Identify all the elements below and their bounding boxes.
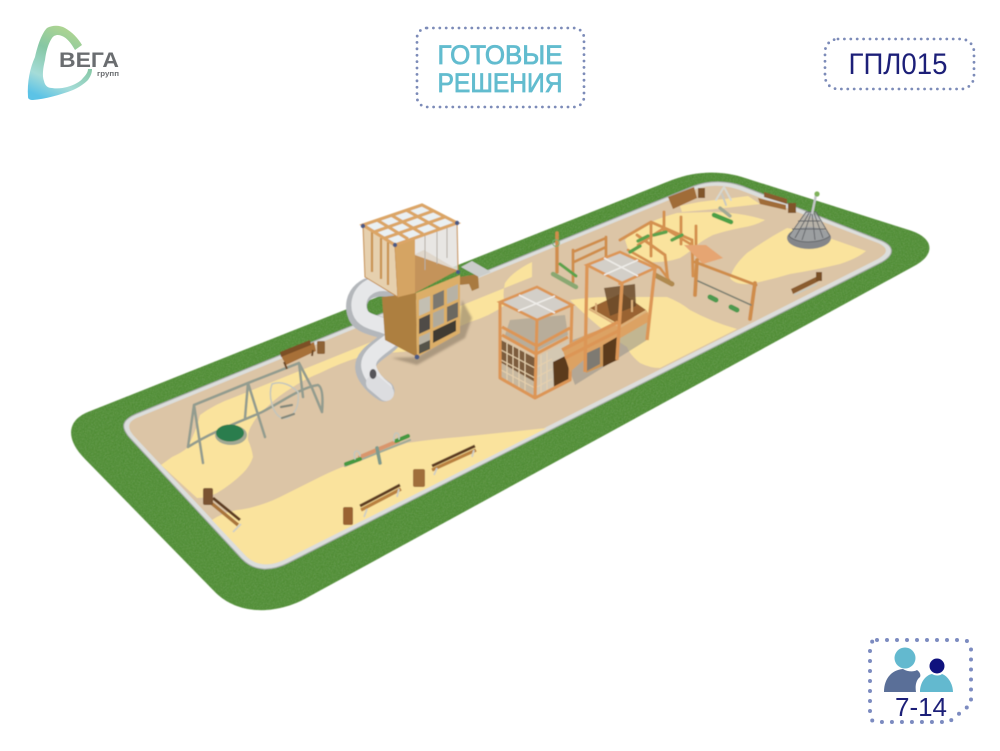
net wall [500,340,535,398]
logo subtitle: групп [97,71,119,78]
seesaw [345,433,410,466]
deck shadow [560,320,650,385]
bench: lower left [360,485,401,517]
logo crescent icon [28,26,92,100]
tower [361,205,479,365]
badge heading line 2: РЕШЕНИЯ [438,68,562,98]
tower corner joints [361,221,460,359]
posts [562,252,655,372]
logo wordmark: ВЕГА [59,49,119,72]
lower box panels [419,284,458,354]
yellow zone: upper left strip and swing area [161,262,532,498]
badge: age group [870,640,971,722]
play structure: cube with net [500,287,650,398]
bin 1 [413,469,425,487]
badge: ready solutions [417,28,584,107]
climbing net dome [787,191,831,249]
sand surface [129,186,886,564]
yellow zone: right [730,228,866,284]
bench: far left [210,498,241,532]
curb [124,182,891,569]
badge heading line 1: ГОТОВЫЕ [438,40,562,70]
bench: top left [280,340,325,369]
dark panels [603,337,617,367]
yellow zone: top centre [625,212,765,262]
footpath stub [461,261,491,277]
bin 3 [203,488,213,505]
brown panel [553,354,570,389]
age range: 7-14 [895,692,947,722]
rings bar [695,260,756,319]
posts [500,302,572,398]
upper box floor [365,250,458,297]
playground plan [71,173,929,610]
icon: adult figure [884,648,920,692]
slide [357,284,395,393]
bridge deck [562,312,648,372]
spring rider [714,187,731,222]
yellow zone: centre [570,297,737,368]
play structure: climbing frame [620,212,696,284]
yellow zone: lower band [212,428,547,564]
roof grid [363,205,457,245]
swing set [188,363,322,463]
roof [587,252,655,283]
product code text: ГПЛ015 [848,48,948,81]
bench: top B [758,192,796,213]
side attachment [460,274,479,291]
shadow [392,300,472,365]
platform [590,293,646,325]
bench: top A [668,187,705,209]
lower box left face [382,293,417,357]
upper box walls [363,225,398,297]
bin 2 [343,507,353,525]
bench: lower middle [432,446,476,475]
interior grey [505,315,568,352]
logo: Vega Group [28,26,119,100]
icon: child figure [920,658,953,692]
nest swing [215,424,247,445]
lower box right face [416,275,460,357]
grass border [71,173,929,610]
play structure: far bars [553,233,606,287]
play structure: bridge and roofed tower [562,252,655,373]
ramp [684,245,723,264]
bench: right [791,272,822,295]
roof [500,287,572,320]
badge: product code [825,39,974,89]
yellow zone: top strip [680,196,760,212]
